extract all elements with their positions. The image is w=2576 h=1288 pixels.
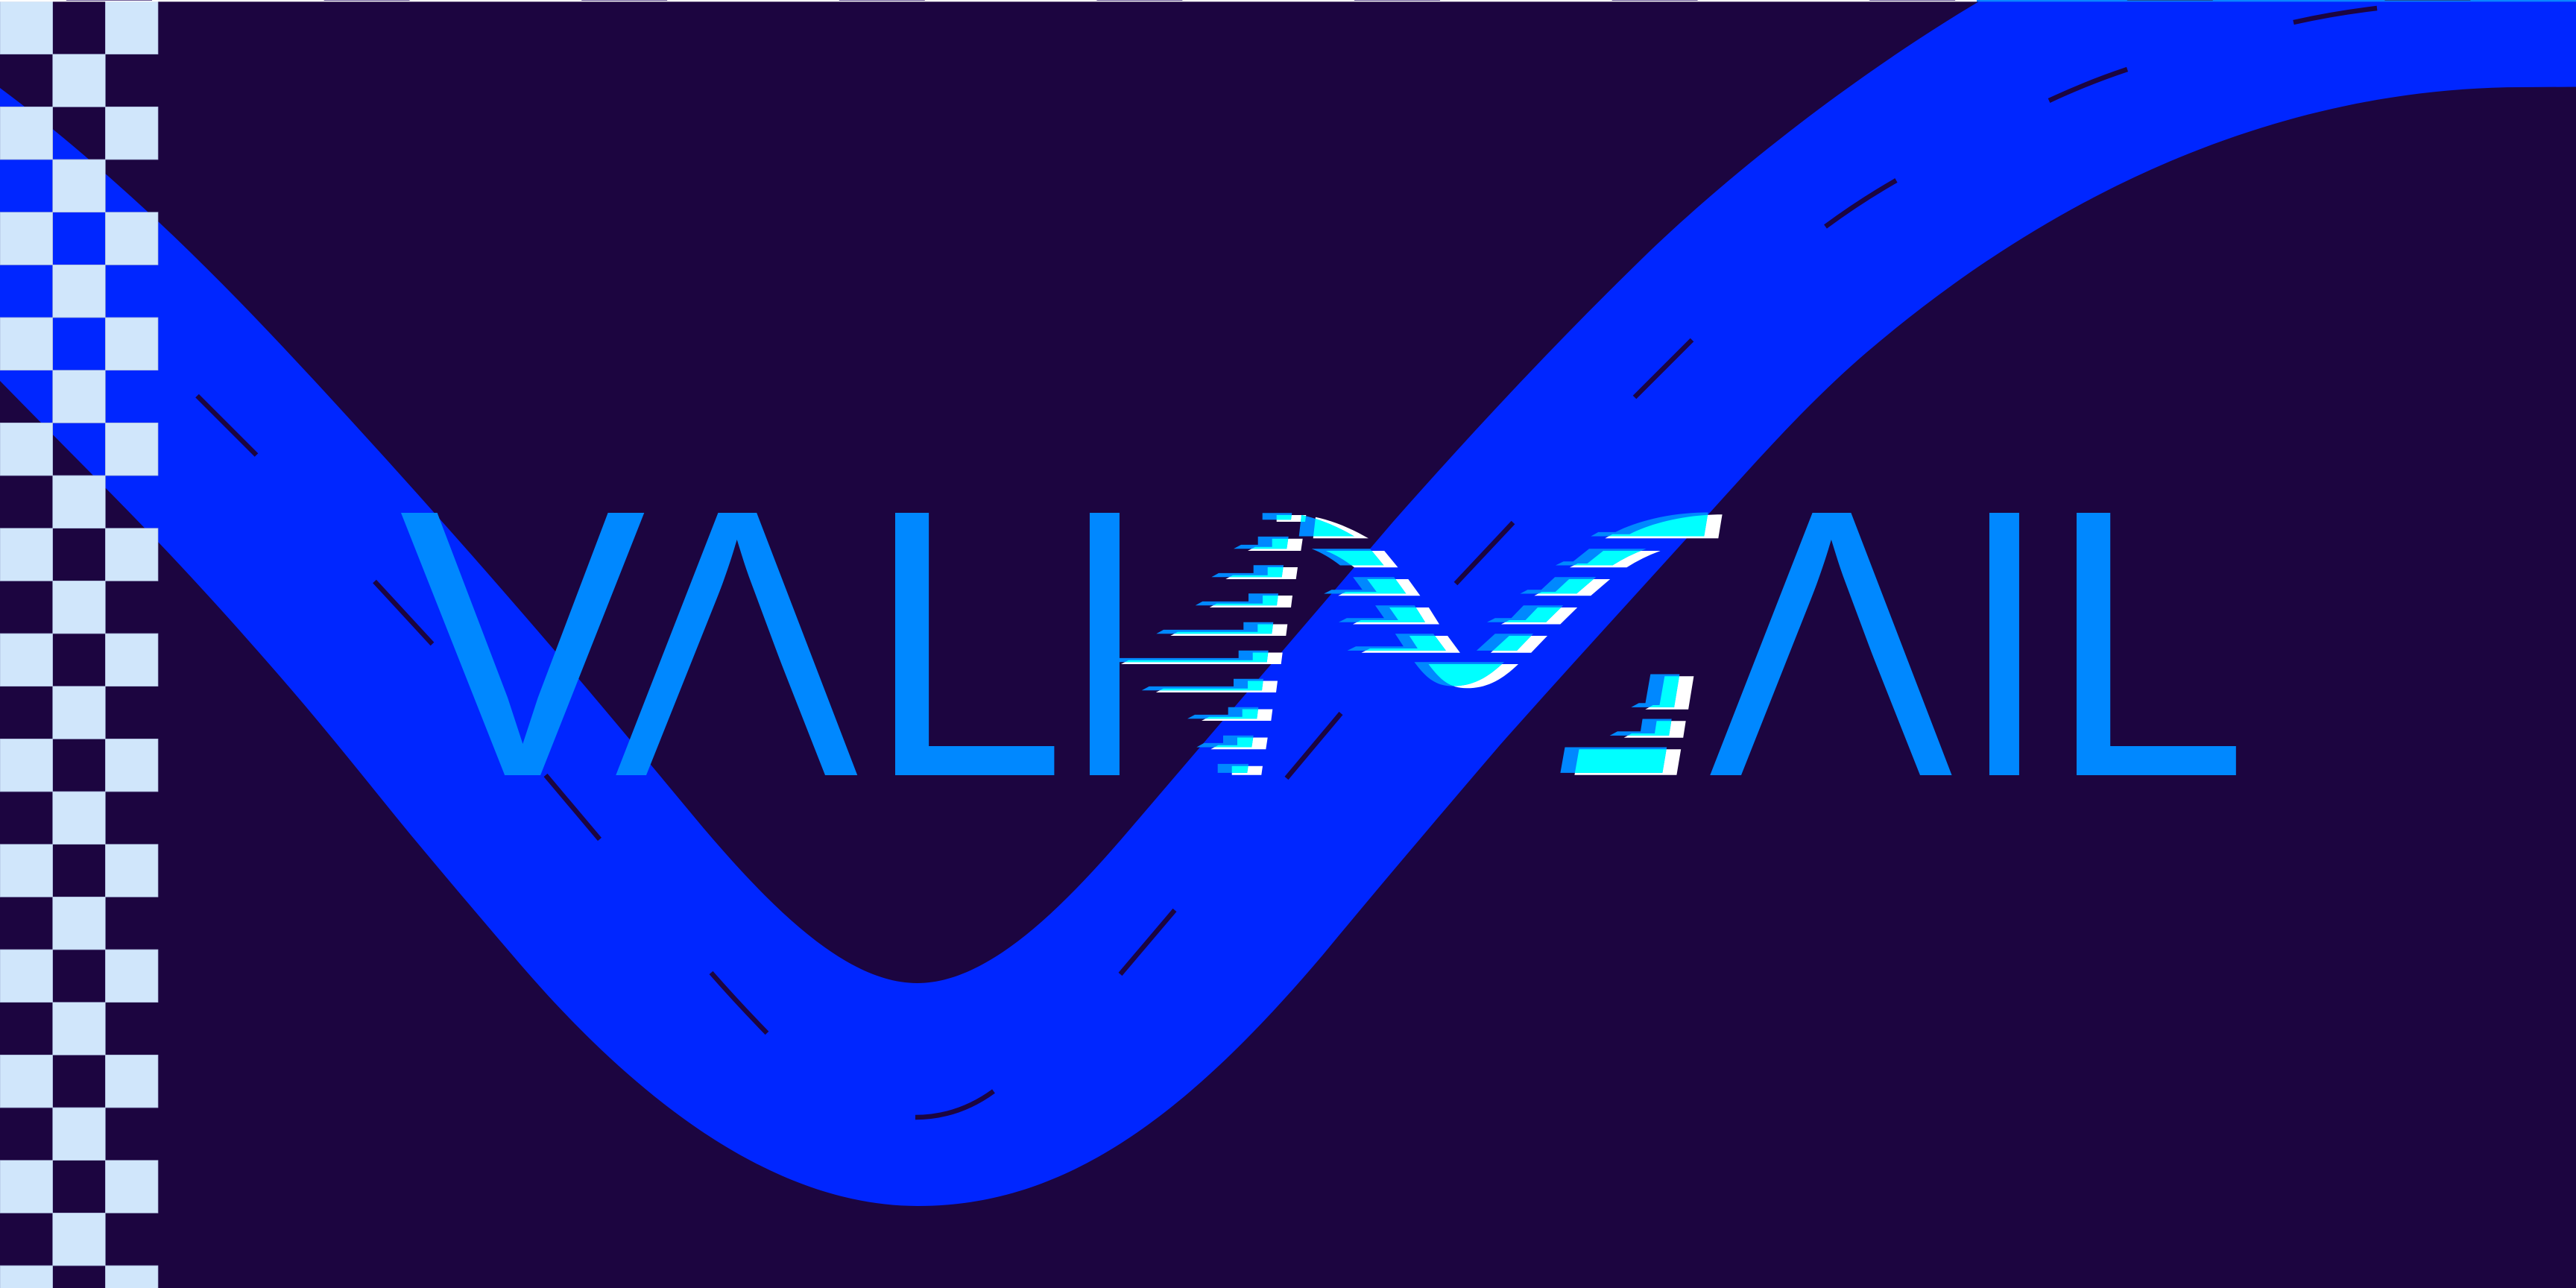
dash 8 [1456, 523, 1513, 584]
logo centre mark: glitched slices [1107, 513, 1723, 775]
cyan overlap layer [1107, 513, 1708, 773]
dash 6 [1120, 910, 1175, 974]
dash 4 [711, 973, 767, 1033]
letter L: L [2047, 430, 2248, 856]
dash 3 [546, 775, 599, 839]
letter A: A [1709, 431, 1954, 856]
top edge line [0, 0, 2576, 1]
dash 12 [2294, 8, 2377, 22]
dash 9 [1635, 340, 1692, 397]
dash 11 [2049, 69, 2127, 101]
dash 10 [1825, 180, 1896, 227]
logo wordmark: VALI [401, 513, 1120, 775]
dash 7 [1287, 713, 1341, 778]
dash 2 [374, 581, 432, 644]
dash 1 [197, 396, 256, 455]
letter I: I [1060, 431, 1149, 856]
dash 5 [915, 1091, 994, 1117]
letter L: L [865, 430, 1066, 856]
logo wordmark: AIL [1709, 430, 2248, 856]
letter I: I [1960, 431, 2049, 856]
chequered strip [0, 1, 158, 1288]
letter A: A [615, 431, 860, 856]
road centre dashes [197, 8, 2377, 1117]
blue offset slice layer [1107, 513, 1708, 773]
letter V: V [400, 430, 648, 856]
white slice layer [1121, 514, 1723, 775]
